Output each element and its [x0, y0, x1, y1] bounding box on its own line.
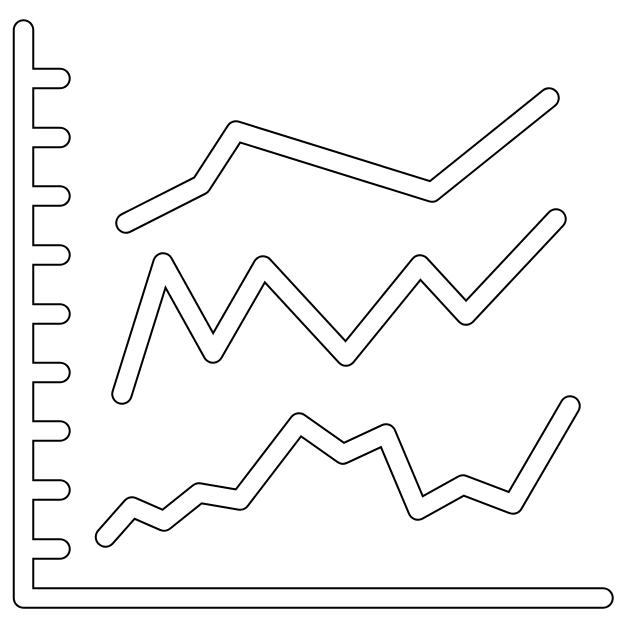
bottom data line [106, 406, 570, 537]
middle data line [122, 219, 556, 394]
top data line [126, 98, 549, 223]
